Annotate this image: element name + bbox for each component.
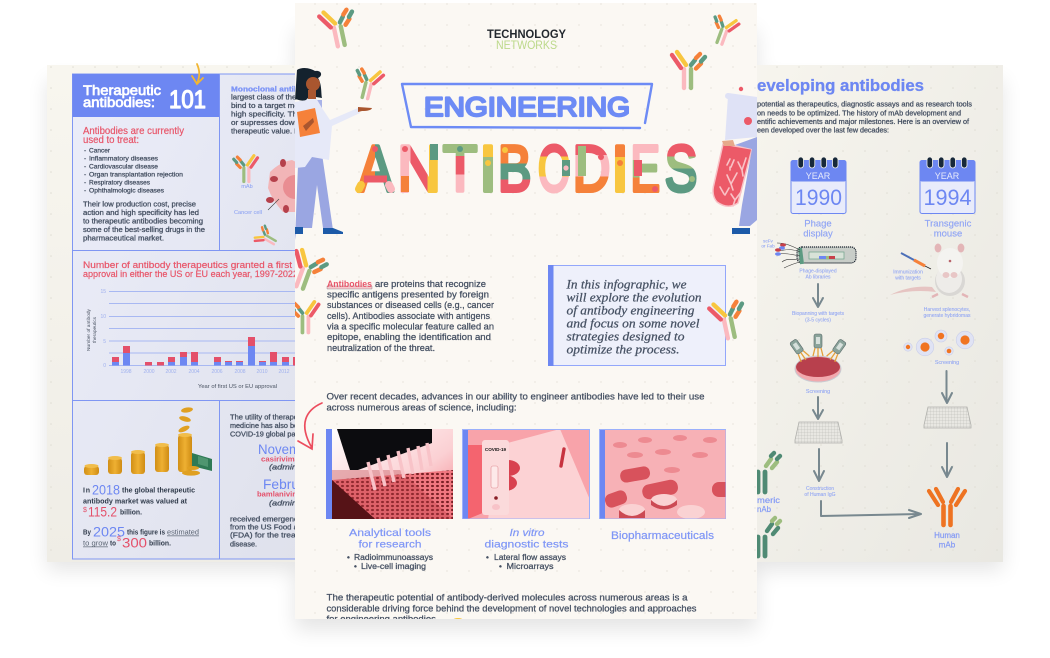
list: in vitro: • — [499, 562, 502, 571]
title: Antibodies: E — [630, 132, 660, 205]
list of diseases: Cardiovascular disease — [89, 164, 158, 170]
illustration: mouse: Immunization — [893, 270, 923, 276]
caption: analytical tools — [349, 528, 431, 548]
illustration: mAb attacking cancer cell — [234, 156, 307, 250]
heading: currently used to treat: used to treat: — [83, 135, 139, 146]
text: market value: By — [83, 530, 91, 536]
illustration: phage: Phage-displayed — [799, 268, 837, 274]
illustration: phage: Ab libraries — [805, 274, 831, 280]
title: Antibodies: S — [665, 132, 697, 205]
text: COVID-19 emergency authorization: (admini — [269, 500, 300, 508]
label: chimeric mAb: nAb — [757, 505, 772, 514]
label: phage display: display — [803, 228, 833, 240]
label: transgenic mouse — [925, 218, 972, 240]
text: monoclonal antibodies — [231, 86, 300, 136]
illustration: petri dish with phages — [789, 334, 847, 382]
label: human mAb: Human — [934, 531, 960, 540]
text: therapeutic potential — [326, 594, 696, 619]
bar chart: antibody approvals: Year of first US or EU approval — [198, 384, 277, 390]
image: analytical tools — [326, 429, 453, 519]
icon: antibody on callout — [709, 299, 748, 341]
text: therapeutic potential: for engineering antibodies. — [326, 614, 438, 625]
image: biopharmaceuticals — [599, 429, 732, 519]
text: market value: $ — [117, 536, 121, 543]
text: market value: antibody market was valued at — [83, 498, 188, 506]
text: antibodies definition: are proteins that recognize — [375, 279, 486, 290]
text: COVID-19 emergency authorization: Febru — [263, 476, 299, 492]
intro text: entific achievements and major milestones. Here is an overview of — [757, 117, 969, 126]
callout: infographic intro — [548, 265, 726, 366]
bar chart: antibody approvals: 2002 — [165, 369, 177, 375]
callout: infographic intro: and focus on some novel — [566, 316, 700, 330]
label: phage display — [803, 218, 833, 240]
bar chart: antibody approvals: 2006 — [211, 369, 223, 375]
bar chart: antibody approvals: Number of antibody — [86, 308, 92, 351]
title: Antibodies: N — [397, 132, 441, 205]
text: market value: In — [83, 488, 90, 494]
text: monoclonal antibodies: high specificity. Thi — [231, 112, 300, 118]
list of diseases: - — [84, 148, 86, 154]
label: harvest splenocytes: generate hybridomas — [924, 313, 971, 319]
list: analytical tools: • — [347, 553, 350, 562]
text: market value: 2025 — [93, 524, 125, 540]
text: monoclonal antibodies: largest class of ther — [231, 94, 300, 102]
label: transgenic mouse: mouse — [934, 228, 962, 240]
title: Antibodies: I — [611, 132, 629, 205]
text: over recent decades — [326, 392, 704, 414]
label: construction of human IgG — [804, 486, 836, 498]
text: COVID-19 emergency authorization: bamlanivim — [257, 492, 299, 498]
bar chart: antibody approvals: 2008 — [234, 369, 246, 375]
illustration: well plate — [924, 407, 971, 428]
callout: infographic intro: will explore the evolution — [566, 290, 702, 304]
bar chart: antibody approvals: 2012 — [278, 369, 290, 375]
heading: currently used to treat — [83, 126, 184, 146]
text: antibodies definition: specific antigens presented by foreign — [327, 290, 489, 300]
calendar: 1994: 1994 — [924, 185, 972, 210]
list: analytical tools: Live-cell imaging — [361, 562, 426, 571]
calendar: 1990: YEAR — [806, 171, 831, 181]
text: COVID-19 emergency authorization: disease. — [230, 542, 257, 548]
header: therapeutic antibodies 101 — [72, 74, 220, 117]
intro text: een developed over the last few decades: — [757, 126, 889, 134]
arrow: red curved — [298, 403, 322, 449]
illustration: mAb attacking cancer cell: mAb — [241, 184, 253, 190]
icon: yellow arrow — [192, 64, 203, 84]
illustration: mAb attacking cancer cell: Cancer cell — [234, 210, 262, 216]
label: human mAb — [934, 531, 960, 550]
callout: infographic intro: optimize the process. — [566, 342, 680, 356]
title box: Engineering — [402, 84, 652, 128]
label: construction of human IgG: Construction — [806, 486, 834, 492]
text: COVID-19 emergency authorization: COVID-19 global par — [230, 432, 299, 438]
bar chart: antibody approvals: 10 — [100, 314, 106, 320]
label: harvest splenocytes — [924, 307, 971, 319]
label: screening: Screening — [806, 389, 830, 395]
illustration: hybridoma cells — [904, 330, 974, 356]
text: antibodies definition: neutralization of the threat. — [327, 343, 435, 354]
text: COVID-19 emergency authorization: from the US Food a — [230, 524, 298, 532]
illustration: phage: scFv — [763, 238, 774, 244]
intro text: potential as therapeutics, diagnostic assays and as research tools — [757, 100, 972, 108]
text: over recent decades: Over recent decades, advances in our ability to engineer antibodies have led to their use — [326, 392, 704, 402]
label: biopanning: Biopanning with targets — [792, 311, 844, 317]
image: in vitro test: COVID-19 — [485, 447, 507, 452]
text: antibodies definition: via a specific molecular feature called an — [327, 322, 494, 332]
header: therapeutic antibodies 101: Therapeutic — [83, 83, 161, 98]
intro text — [757, 100, 972, 134]
icon: yellow mark — [454, 618, 462, 619]
bar chart: antibody approvals: 1998 — [120, 369, 132, 375]
list: in vitro: Lateral flow assays — [494, 553, 566, 562]
text: market value: $ — [83, 507, 87, 514]
text: market value: billion. — [149, 540, 171, 548]
list of diseases: Respiratory diseases — [89, 180, 151, 186]
text: therapeutic potential: The therapeutic potential of antibody-derived molecules across numerous areas is a — [326, 592, 688, 604]
text: over recent decades: across numerous areas of science, including: — [326, 402, 516, 414]
paragraph: low production cost: action and high specificity has led — [83, 210, 199, 217]
bar chart: antibody approvals: 2010 — [256, 369, 268, 375]
title: Antibodies: B — [498, 132, 531, 205]
text: therapeutic potential: considerable driving force behind the development of novel technologies and approaches — [326, 604, 697, 614]
text: COVID-19 emergency authorization: (FDA) for the treat — [230, 532, 298, 540]
label: chimeric mAb: meric — [757, 496, 780, 505]
heading: chart title: Number of antibody therapeutics granted a first — [83, 260, 293, 270]
panel: right page — [740, 65, 1003, 562]
logo: Technology Networks — [487, 30, 566, 49]
image: in vitro test — [462, 429, 590, 519]
paragraph: low production cost: Their low production cost, precise — [83, 202, 196, 208]
icon: chimeric mAb bottom — [758, 518, 780, 556]
heading: currently used to treat: Antibodies are currently — [83, 126, 184, 137]
logo: Technology Networks: TECHNOLOGY — [487, 28, 566, 41]
paragraph: low production cost: pharmaceutical market. — [83, 236, 164, 242]
text: antibodies definition: Antibodies — [327, 279, 372, 290]
text: market value: billion. — [120, 510, 142, 516]
list of diseases — [84, 148, 183, 194]
list of diseases: Organ transplantation rejection — [89, 172, 183, 178]
list: in vitro: Microarrays — [506, 562, 554, 571]
text: monoclonal antibodies: Monoclonal antib — [231, 86, 299, 94]
label: transgenic mouse: Transgenic — [925, 218, 972, 230]
calendar: 1994 — [920, 157, 975, 214]
calendar: 1990 — [791, 157, 846, 214]
bar chart: antibody approvals: 15 — [100, 289, 106, 295]
list of diseases: Inflammatory diseases — [89, 156, 159, 162]
title: Antibodies: D — [573, 132, 610, 205]
text: COVID-19 emergency authorization — [230, 414, 300, 548]
label: construction of human IgG: of Human IgG — [804, 492, 836, 498]
label: chimeric mAb — [757, 496, 780, 514]
title accents: coloured letter segments — [359, 144, 695, 192]
list of diseases: Cancer — [89, 148, 111, 154]
icon: antibody decorations — [285, 7, 740, 333]
title: Antibodies: A — [358, 132, 394, 205]
label: harvest splenocytes: Harvest splenocytes, — [924, 307, 970, 313]
caption: in vitro diagnostic tests: In vitro — [510, 528, 545, 539]
bar chart: antibody approvals: 5 — [103, 339, 106, 345]
arrows: flow steps — [813, 284, 952, 518]
header: therapeutic antibodies 101: antibodies: — [83, 95, 155, 110]
list of diseases: - — [84, 156, 86, 162]
illustration: mouse: with targets — [895, 276, 921, 282]
heading: developing antibodies: eveloping antibodies — [757, 77, 924, 95]
label: phage display: Phage — [804, 218, 832, 230]
list: analytical tools — [347, 553, 433, 571]
bar chart: antibody approvals — [86, 289, 300, 390]
illustration: phage: or Fab — [761, 244, 775, 248]
list: analytical tools: Radioimmunoassays — [354, 553, 433, 562]
calendar: 1990: 1990 — [795, 185, 842, 210]
intro text: on needs to be optimized. The history of mAb development and — [757, 108, 961, 118]
text: monoclonal antibodies: bind to a target mo — [231, 103, 299, 110]
text: COVID-19 emergency authorization: The utility of therape — [230, 414, 298, 422]
text: market value: the global therapeutic — [122, 488, 195, 494]
illustration: mouse — [890, 244, 968, 297]
heading: chart title: approval in either the US or EU each year, 1997-2022 — [83, 269, 298, 279]
panel: center page — [285, 3, 757, 625]
text: market value: to grow — [83, 540, 109, 548]
bar chart: antibody approvals: 2004 — [188, 369, 200, 375]
text: monoclonal antibodies: or supresses down — [231, 120, 299, 127]
text: market value: estimated — [167, 530, 199, 536]
list of diseases: - — [84, 164, 86, 170]
paragraph: low production cost: some of the best-selling drugs in the — [83, 227, 205, 234]
text: market value: 300 — [122, 536, 147, 550]
list: in vitro: • — [486, 553, 489, 562]
list: in vitro — [486, 553, 566, 571]
callout: infographic intro: In this infographic, we — [565, 278, 687, 292]
label: human mAb: mAb — [939, 540, 956, 550]
text: antibodies definition: cells). Antibodies associate with antigens — [327, 311, 490, 322]
callout: infographic intro: strategies designed to — [566, 330, 685, 344]
text: antibodies definition — [327, 279, 495, 354]
heading: chart title — [83, 260, 298, 279]
text: COVID-19 emergency authorization: received emergenc — [230, 516, 299, 524]
callout: infographic intro: of antibody engineering — [566, 304, 695, 318]
calendar: 1994: YEAR — [935, 171, 960, 181]
caption: biopharmaceuticals: Biopharmaceuticals — [611, 530, 715, 542]
text: market value: 115.2 — [88, 504, 117, 520]
caption: analytical tools: for research — [358, 540, 422, 550]
list of diseases: - — [84, 172, 86, 178]
logo: Technology Networks: NETWORKS — [496, 39, 557, 52]
text: COVID-19 emergency authorization: medicine has also be — [230, 423, 298, 430]
icon: chimeric mAb top — [758, 453, 780, 492]
label: biopanning — [792, 311, 844, 324]
illustration: test tube with antibodies — [713, 87, 757, 234]
bar chart: antibody approvals: 2000 — [143, 369, 155, 375]
divider lines — [72, 74, 300, 559]
list of diseases: - — [84, 180, 86, 186]
caption: analytical tools: Analytical tools — [349, 528, 431, 539]
label: screening: Screening — [935, 360, 959, 366]
caption: in vitro diagnostic tests — [484, 528, 568, 550]
illustration: well plate — [795, 422, 842, 443]
text: COVID-19 emergency authorization: (admini — [269, 464, 300, 472]
illustration: scientist — [295, 68, 372, 240]
text: COVID-19 emergency authorization: Novem — [258, 441, 300, 457]
text: COVID-19 emergency authorization: casirivima — [261, 456, 299, 464]
illustration: coin stacks — [84, 407, 212, 476]
title: Antibodies: O — [538, 132, 570, 205]
text: antibodies definition: epitope, enabling the identification and — [327, 332, 491, 343]
title box: Engineering: ENGINEERING — [424, 92, 630, 122]
paragraph: low production cost — [83, 202, 205, 242]
title: Antibodies: T — [443, 132, 477, 205]
bar chart: antibody approvals: therapeutics — [92, 316, 98, 343]
panel: left page — [47, 64, 307, 562]
title: Antibodies — [356, 143, 696, 194]
list of diseases: - — [84, 188, 86, 194]
text: market value — [83, 482, 199, 550]
paragraph: low production cost: to therapeutic antibodies becoming — [83, 218, 203, 226]
illustration: phage — [761, 238, 856, 280]
list of diseases: Ophthalmologic diseases — [89, 188, 165, 194]
text: antibodies definition: substances or diseased cells (e.g., cancer — [327, 300, 495, 311]
bar chart: antibody approvals: 0 — [103, 363, 106, 369]
text: market value: to — [110, 540, 116, 548]
header: therapeutic antibodies 101: 101 — [169, 86, 206, 114]
caption: in vitro diagnostic tests: diagnostic tests — [484, 540, 568, 550]
title: Antibodies: I — [479, 132, 497, 205]
list: analytical tools: • — [354, 562, 357, 571]
text: monoclonal antibodies: therapeutic value. F — [231, 128, 299, 136]
icon: human mAb — [929, 489, 965, 525]
text: market value: this figure is — [127, 530, 165, 536]
label: biopanning: (3-5 cycles) — [805, 318, 831, 324]
text: market value: 2018 — [92, 482, 120, 498]
